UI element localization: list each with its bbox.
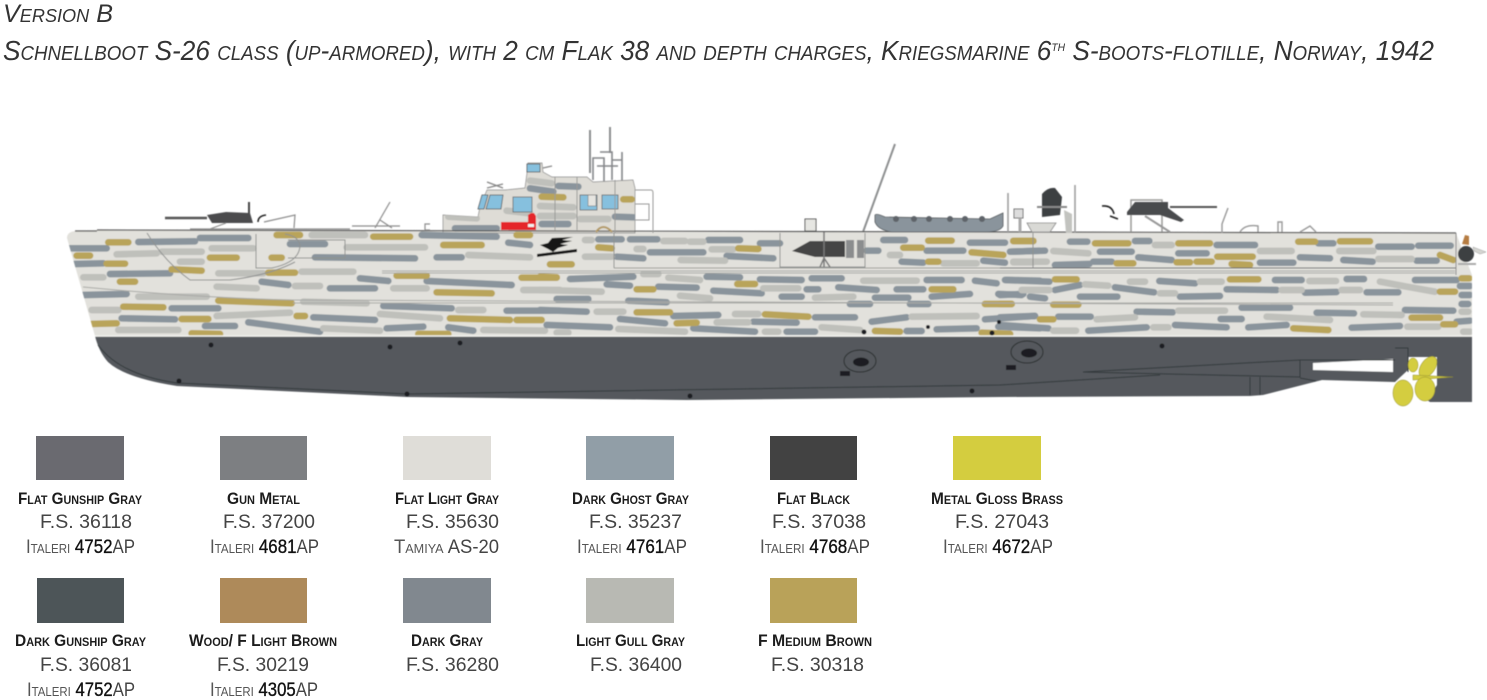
swatch: Flat Black bbox=[760, 436, 870, 558]
swatch: Flat Light Gray bbox=[394, 436, 499, 558]
swatch: Gun Metal: Italeri 4681AP bbox=[210, 537, 319, 558]
depth charge bbox=[792, 219, 864, 267]
swatch: Dark Ghost Gray: Italeri 4761AP bbox=[577, 537, 687, 558]
swatch: Dark Ghost Gray bbox=[572, 436, 689, 558]
swatch: Flat Gunship Gray: F.S. 36118 bbox=[40, 512, 132, 533]
hull fittings: holes and intakes bbox=[176, 320, 1164, 398]
inflatable raft bbox=[875, 213, 1003, 232]
superstructure bbox=[443, 163, 635, 233]
swatch: Flat Light Gray: F.S. 35630 bbox=[406, 512, 499, 533]
camouflage: hull bbox=[68, 235, 1470, 334]
swatch: Gun Metal bbox=[210, 436, 319, 558]
swatch: Dark Gunship Gray bbox=[15, 578, 146, 700]
upper hull bbox=[67, 230, 1472, 336]
swatch: Flat Gunship Gray bbox=[18, 436, 142, 558]
swatch: Dark Gunship Gray: Dark Gunship Gray bbox=[15, 631, 146, 650]
swatch: Flat Light Gray: Tamiya AS-20 bbox=[394, 537, 499, 558]
swatch: Dark Gray: Dark Gray bbox=[411, 631, 483, 650]
swatch: Flat Gunship Gray: Italeri 4752AP bbox=[26, 537, 135, 558]
lower hull bbox=[95, 336, 1472, 402]
swatch: Light Gull Gray: Light Gull Gray bbox=[576, 631, 685, 650]
swatch: Flat Gunship Gray: Flat Gunship Gray bbox=[18, 489, 142, 508]
swatch: Flat Light Gray: Flat Light Gray bbox=[395, 489, 499, 508]
stern fittings bbox=[1458, 235, 1486, 264]
propeller bbox=[1393, 353, 1453, 406]
bridge details bbox=[478, 164, 653, 233]
swatch: Metal Gloss Brass: Metal Gloss Brass bbox=[931, 489, 1063, 508]
swatch: Wood / F Light Brown bbox=[189, 578, 337, 700]
swatch: Flat Black: F.S. 37038 bbox=[772, 512, 866, 533]
aft gun bbox=[1102, 200, 1316, 233]
emblem bbox=[537, 237, 577, 257]
gap above skeg bbox=[1313, 359, 1393, 372]
swatch: Dark Ghost Gray: Dark Ghost Gray bbox=[572, 489, 689, 508]
swatch: Gun Metal: F.S. 37200 bbox=[223, 512, 315, 533]
lower hull lines bbox=[98, 345, 1408, 395]
swatch: Wood / F Light Brown: Wood/ F Light Brown bbox=[189, 631, 337, 650]
swatch: Metal Gloss Brass bbox=[931, 436, 1063, 558]
swatch: Gun Metal: Gun Metal bbox=[227, 489, 300, 508]
swatch: Dark Gunship Gray: F.S. 36081 bbox=[40, 655, 132, 676]
aft deck equipment bbox=[1008, 185, 1075, 233]
mast and crane bbox=[590, 127, 895, 232]
heading: description: S-boots-flotille, Norway, 1942 bbox=[1065, 35, 1434, 66]
swatch: Metal Gloss Brass: Italeri 4672AP bbox=[943, 537, 1053, 558]
swatch: Wood / F Light Brown: F.S. 30219 bbox=[217, 655, 309, 676]
camouflage: superstructure bbox=[448, 181, 633, 228]
swatch: Light Gull Gray bbox=[576, 578, 685, 676]
swatch: Dark Gray bbox=[403, 578, 499, 676]
heading: description: Schnellboot S-26 class (up-armored), with 2 cm Flak 38 and depth charges, Kriegsmarine 6 bbox=[3, 35, 1124, 66]
swatch: Dark Gray: F.S. 36280 bbox=[406, 655, 499, 676]
swatch: Flat Black: Flat Black bbox=[777, 489, 850, 508]
swatch: F Medium Brown bbox=[758, 578, 872, 676]
ship side profile bbox=[67, 127, 1486, 406]
swatch: Flat Black: Italeri 4768AP bbox=[760, 537, 870, 558]
swatch: Metal Gloss Brass: F.S. 27043 bbox=[955, 512, 1049, 533]
forward gun bbox=[165, 202, 430, 230]
swatch: Dark Ghost Gray: F.S. 35237 bbox=[589, 512, 682, 533]
hull detail lines bbox=[75, 230, 1472, 336]
heading: version: Version B bbox=[3, 0, 113, 28]
heading: description: th bbox=[1051, 38, 1065, 55]
swatch: F Medium Brown: F Medium Brown bbox=[758, 631, 872, 650]
swatch: Light Gull Gray: F.S. 36400 bbox=[590, 655, 682, 676]
swatch: F Medium Brown: F.S. 30318 bbox=[771, 655, 864, 676]
